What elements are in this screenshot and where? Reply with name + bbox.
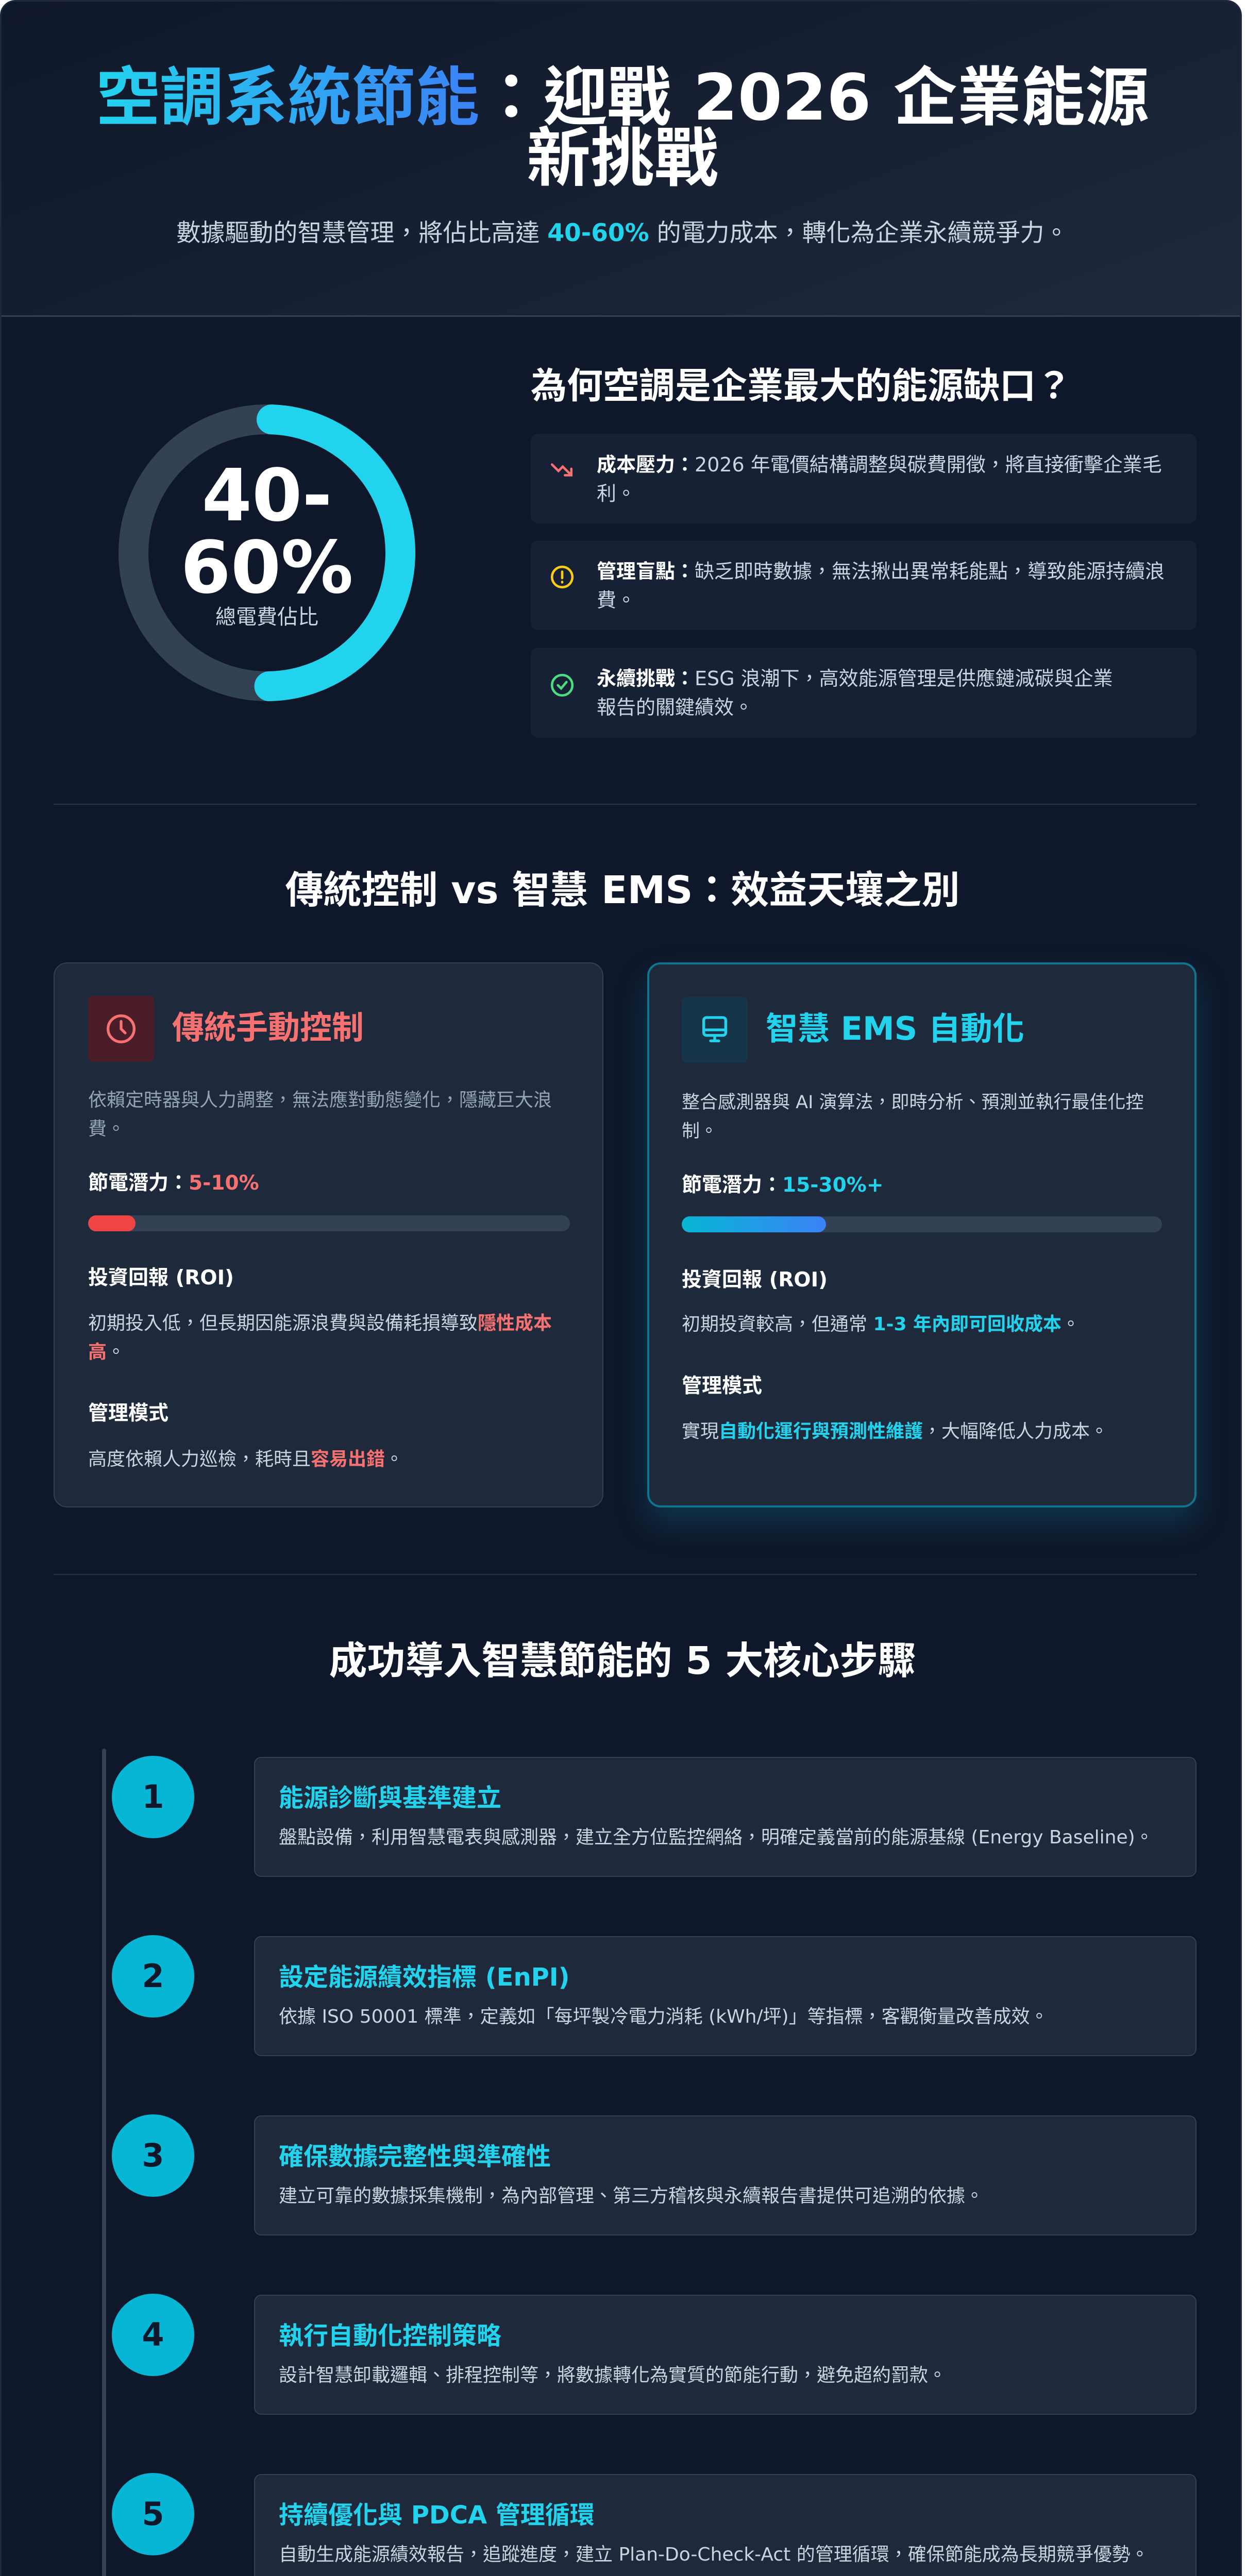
card: sustainability bbox=[531, 648, 1197, 738]
donut label: 40- bbox=[202, 454, 332, 538]
title: 智慧 EMS 自動化 bbox=[766, 1010, 1024, 1047]
card: sustainability: 永續挑戰：ESG 浪潮下，高效能源管理是供應鏈減碳與企業報告的關鍵績效。 bbox=[597, 667, 1113, 719]
donut label: 總電費佔比 bbox=[215, 605, 318, 629]
card: management blind spot bbox=[531, 540, 1197, 630]
step 4: 設計智慧卸載邏輯、排程控制等，將數據轉化為實質的節能行動，避免超約罰款。 bbox=[279, 2365, 947, 2386]
step 1: 1 bbox=[142, 1778, 164, 1816]
card: management blind spot: 管理盲點：缺乏即時數據，無法揪出異常耗能點，導致能源持續浪費。 bbox=[597, 560, 1165, 612]
heading: comparison: 傳統控制 vs 智慧 EMS：效益天壤之別 bbox=[285, 868, 960, 912]
header bbox=[2, 2, 1243, 317]
saving potential: 節電潛力：15-30%+ bbox=[682, 1174, 884, 1197]
timeline bbox=[102, 1749, 1197, 2576]
step 3: 確保數據完整性與準確性 bbox=[279, 2142, 551, 2171]
icon: check bbox=[550, 674, 574, 697]
step 2: 依據 ISO 50001 標準，定義如「每坪製冷電力消耗 (kWh/坪)」等指標，客觀衡量改善成效。 bbox=[279, 2006, 1049, 2027]
step 2: 設定能源績效指標 (EnPI) bbox=[279, 1963, 570, 1992]
step 4 bbox=[2, 2295, 1243, 2415]
step 3: 3 bbox=[142, 2137, 164, 2174]
card: cost pressure bbox=[531, 434, 1197, 523]
heading: why: 為何空調是企業最大的能源缺口？ bbox=[531, 365, 1072, 407]
panel: traditional bbox=[54, 962, 603, 1507]
step 3: 建立可靠的數據採集機制，為內部管理、第三方稽核與永續報告書提供可追溯的依據。 bbox=[279, 2185, 984, 2207]
description: 整合感測器與 AI 演算法，即時分析、預測並執行最佳化控制。 bbox=[682, 1092, 1144, 1142]
panel: traditional: 初期投入低，但長期因能源浪費與設備耗損導致隱性成本高。 bbox=[88, 1313, 552, 1363]
panel: smart EMS bbox=[647, 962, 1197, 1507]
step 1: 能源診斷與基準建立 bbox=[279, 1784, 501, 1812]
management mode: 管理模式 bbox=[682, 1375, 762, 1398]
ROI: 投資回報 (ROI) bbox=[682, 1268, 828, 1292]
title: 空調系統節能：迎戰 2026 企業能源 bbox=[96, 61, 1149, 135]
ROI: 投資回報 (ROI) bbox=[88, 1266, 234, 1290]
step 4: 執行自動化控制策略 bbox=[279, 2321, 501, 2350]
step 3 bbox=[2, 2115, 1243, 2235]
management mode: 管理模式 bbox=[88, 1402, 168, 1425]
title: 新挑戰 bbox=[527, 122, 718, 196]
bar bbox=[682, 1216, 1162, 1232]
step 1 bbox=[112, 1756, 1197, 1877]
card: cost pressure: 成本壓力：2026 年電價結構調整與碳費開徵，將直接衝擊企業毛利。 bbox=[597, 453, 1162, 505]
donut label: 60% bbox=[180, 526, 353, 610]
title: 傳統手動控制 bbox=[172, 1009, 364, 1046]
bar bbox=[88, 1215, 570, 1231]
panel: traditional: 高度依賴人力巡檢，耗時且容易出錯。 bbox=[88, 1449, 403, 1470]
donut label bbox=[180, 454, 353, 629]
description: 依賴定時器與人力調整，無法應對動態變化，隱藏巨大浪費。 bbox=[88, 1090, 552, 1140]
step 5: 5 bbox=[142, 2495, 164, 2533]
donut chart bbox=[119, 404, 415, 701]
step 5 bbox=[2, 2474, 1243, 2576]
saving potential: 節電潛力：5-10% bbox=[88, 1172, 259, 1195]
step 2: 2 bbox=[142, 1957, 164, 1995]
step 4: 4 bbox=[142, 2316, 164, 2353]
icon: trend down bbox=[551, 463, 573, 477]
subtitle: 數據驅動的智慧管理，將佔比高達 40-60% 的電力成本，轉化為企業永續競爭力。 bbox=[176, 219, 1069, 247]
panel: smart EMS: 實現自動化運行與預測性維護，大幅降低人力成本。 bbox=[682, 1421, 1108, 1442]
icon: monitor bbox=[682, 997, 748, 1063]
panel: smart EMS: 初期投資較高，但通常 1-3 年內即可回收成本。 bbox=[682, 1314, 1080, 1335]
icon: warning bbox=[550, 566, 574, 588]
title bbox=[96, 61, 1149, 196]
step 5: 持續優化與 PDCA 管理循環 bbox=[279, 2501, 595, 2530]
heading: steps: 成功導入智慧節能的 5 大核心步驟 bbox=[329, 1639, 916, 1683]
step 5: 自動生成能源績效報告，追蹤進度，建立 Plan-Do-Check-Act 的管理循環，確保節能成為長期競爭優勢。 bbox=[279, 2544, 1149, 2565]
step 1: 盤點設備，利用智慧電表與感測器，建立全方位監控網絡，明確定義當前的能源基線 (Energy Baseline)。 bbox=[279, 1827, 1154, 1848]
icon: clock bbox=[88, 996, 154, 1062]
step 2 bbox=[112, 1935, 1197, 2056]
